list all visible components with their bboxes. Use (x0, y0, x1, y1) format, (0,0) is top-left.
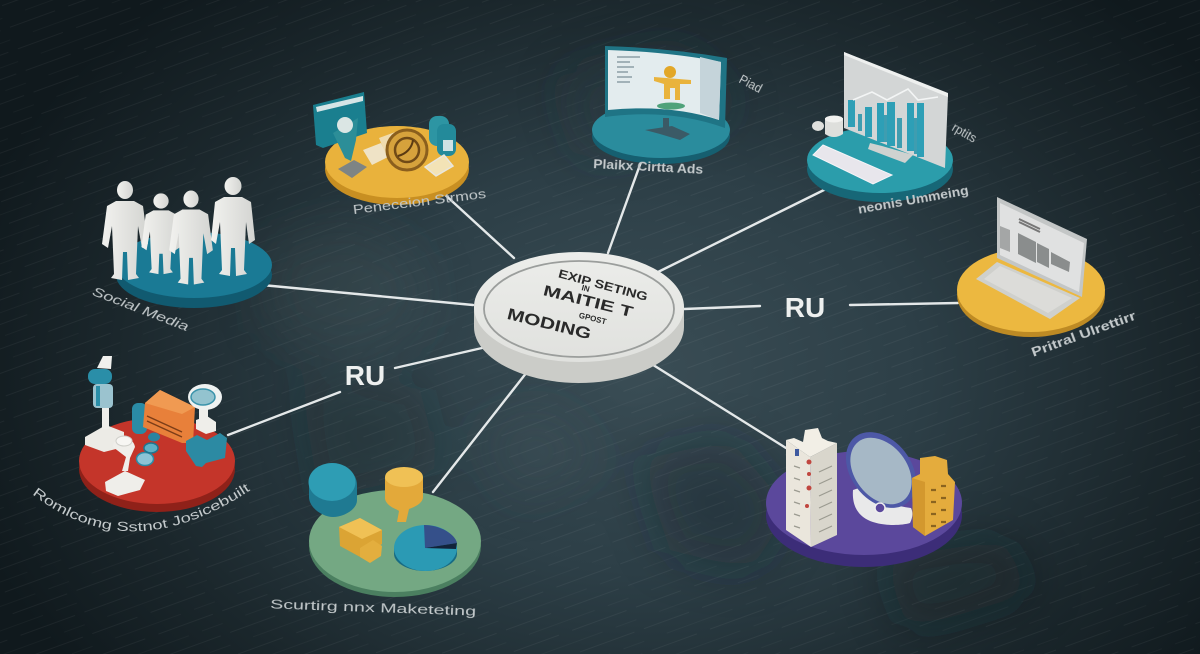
hub text: MODING (505, 306, 593, 343)
icon: yellow cubes (339, 518, 382, 563)
icon: glass mirror (832, 418, 930, 525)
panel: pritral marketing (957, 197, 1138, 360)
icon: mug (812, 116, 843, 137)
hub text (505, 266, 649, 343)
icon: cone emblem (333, 118, 358, 161)
icon: white tower (786, 428, 837, 547)
icon: blue dots (136, 432, 160, 466)
icon: yellow building (912, 456, 955, 536)
panel: social media (90, 177, 272, 334)
icon: people group (102, 177, 255, 284)
icon: monitor chart (844, 52, 948, 168)
icon: monitor stand (645, 118, 690, 140)
label: scoring marketing: Scurtirg nnx Maketeting (270, 596, 476, 619)
hub text: EXIP SETING (557, 266, 649, 304)
icon: small tiles (363, 143, 388, 165)
callout: RU left: RU (345, 360, 385, 391)
icon: open yellow box (425, 155, 453, 176)
icon: orange box (143, 390, 195, 443)
hub text: MAITIE T (541, 282, 635, 321)
label: remarketing: Romlcomg Sstnot Josicebuilt (33, 484, 250, 532)
panel: remarketing / red (33, 356, 250, 532)
icon: teal board (313, 92, 367, 148)
label: social media: Social Media (90, 284, 191, 334)
hub text: IN (581, 283, 591, 294)
icon: curved monitor (605, 46, 727, 128)
label: paid ads: Plaikx Cirtta Ads (593, 156, 704, 177)
icon: teal blocks (186, 433, 227, 467)
panel: paid ads (592, 46, 765, 177)
icon: round lamp (105, 436, 145, 496)
label: penetration strategy: Peneceion Strmos (352, 186, 487, 217)
icon: golden coil (387, 130, 427, 170)
panel: reports marketing (807, 52, 980, 217)
icon: magnifier (188, 384, 222, 434)
callout: RU right: RU (785, 292, 825, 323)
label: pritral marketing: Pritral Ulrettirr (1029, 308, 1138, 360)
icon: teal speech blob (308, 463, 357, 517)
panel: purple buildings (766, 418, 962, 567)
label: side note: rptits (950, 120, 980, 146)
icon: pie chart (394, 525, 457, 571)
icon: keyboard (813, 145, 892, 184)
panel: scoring marketing / green (270, 463, 481, 619)
icon: grey block (338, 160, 367, 178)
panel: penetration strategy (313, 92, 487, 217)
icon: yellow figure (654, 66, 691, 110)
icon: teal backpack (429, 116, 456, 156)
label: side note: Piad (737, 71, 765, 96)
hub text: GPOST (578, 311, 607, 326)
label: reports marketing: neonis Ummeing (857, 182, 970, 217)
icon: teal bottle (132, 403, 147, 434)
icon: laptop (976, 197, 1087, 319)
icon: yellow balloon (385, 467, 423, 522)
icon: tall stand (85, 356, 124, 452)
connector lines (228, 162, 958, 492)
panel: central hub disc (474, 252, 684, 383)
